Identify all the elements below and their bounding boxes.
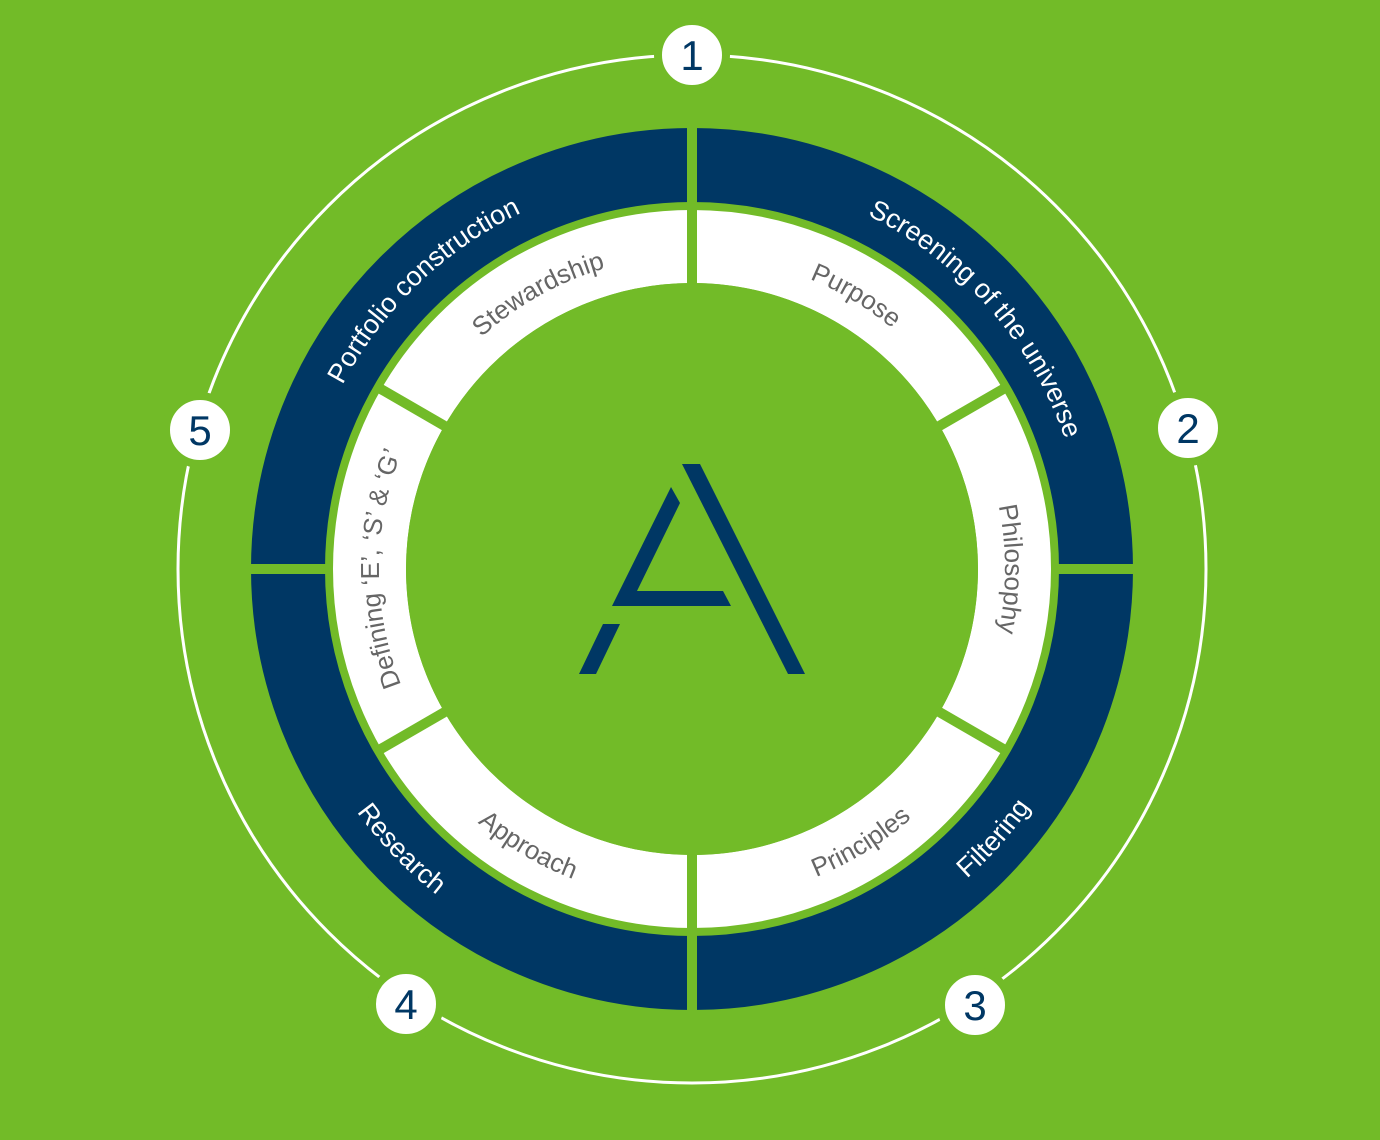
dark ring labels: Portfolio construction [327, 202, 520, 384]
step numbers: 3 [963, 982, 987, 1029]
white ring labels: Stewardship [473, 255, 603, 334]
white ring labels: Purpose [812, 263, 898, 326]
logo A [579, 464, 805, 674]
white ring [370, 200, 1014, 940]
step numbers [166, 21, 1222, 1039]
white ring labels: Principles [811, 810, 910, 876]
step numbers: 4 [394, 981, 418, 1028]
dark ring labels: Filtering [956, 800, 1032, 878]
white ring labels: Philosophy [995, 504, 1024, 635]
step numbers: 1 [680, 32, 704, 79]
step numbers: 2 [1176, 405, 1200, 452]
dark ring [240, 120, 1144, 1020]
step numbers: 5 [188, 407, 212, 454]
dark ring labels: Screening of the universe [870, 201, 1077, 437]
dark ring labels [327, 201, 1077, 894]
white ring labels: Approach [478, 813, 576, 878]
dark ring labels: Research [358, 802, 443, 894]
white ring labels: Defining ‘E’, ‘S’ & ‘G’ [361, 448, 400, 690]
white ring labels [361, 255, 1024, 878]
outer circle [178, 55, 1206, 1083]
